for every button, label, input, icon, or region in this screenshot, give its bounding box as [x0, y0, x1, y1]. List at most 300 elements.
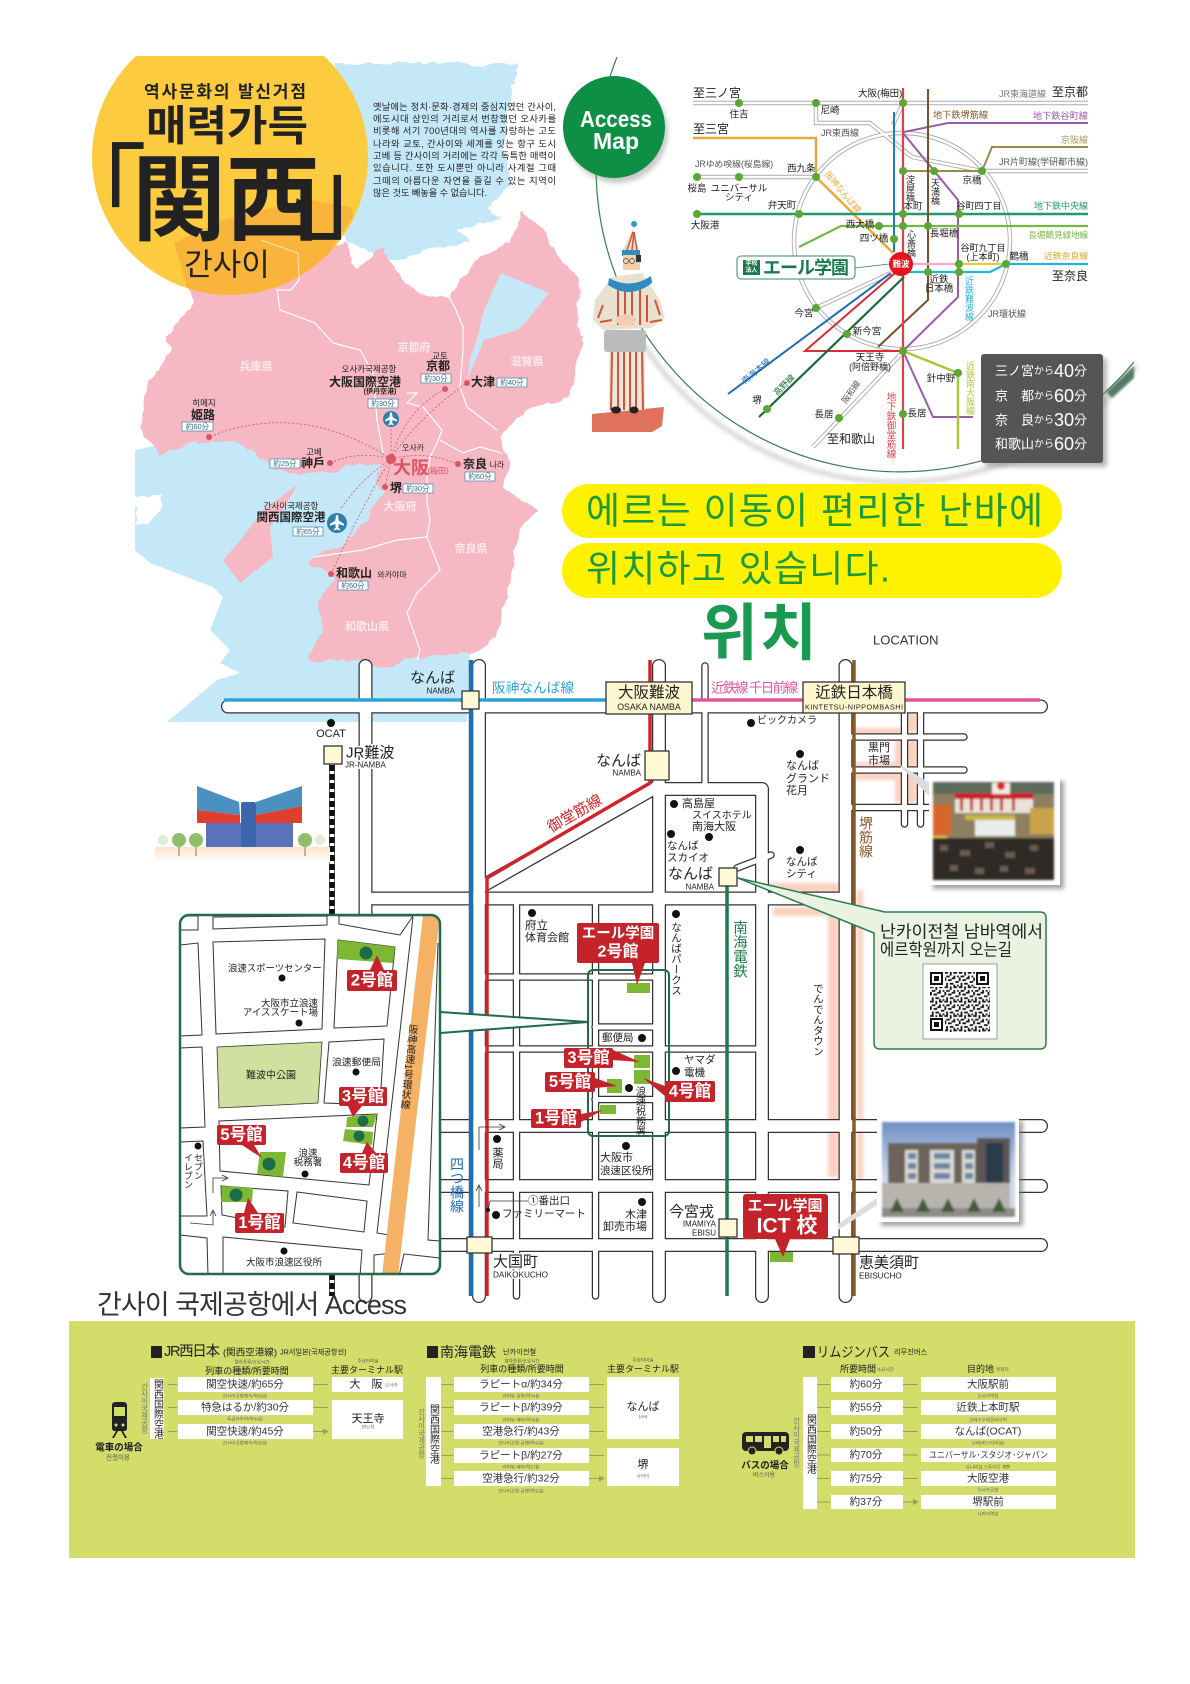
access map badge	[563, 76, 668, 183]
station labels: 至三宮	[693, 121, 729, 136]
namba hub: 難波	[892, 259, 910, 269]
yellow disc	[92, 56, 368, 295]
section: limousine bus: 유니버설 스튜디오 재팬	[966, 1464, 1010, 1470]
rail lines	[224, 660, 1040, 1296]
inset building tags: 2号館	[351, 970, 393, 990]
map labels: 近鉄線 千日前線	[711, 680, 798, 696]
section: limousine bus: 大阪駅前	[967, 1378, 1009, 1390]
inset building tags	[217, 955, 397, 1233]
section: limousine bus: 関西国際空港	[804, 1414, 816, 1474]
station box: osaka namba: 大阪難波	[618, 684, 680, 702]
title: kansai kanji: 関西	[132, 148, 320, 252]
section: limousine bus: 堺駅前	[972, 1495, 1004, 1508]
station labels: 針中野	[927, 372, 956, 384]
section: limousine bus: ユニバーサル･スタジオ･ジャパン	[929, 1450, 1048, 1460]
section: limousine bus: 約55分	[850, 1400, 883, 1414]
map labels: 府立	[525, 918, 548, 932]
city labels: 와카야마	[377, 570, 407, 580]
station labels: 京阪線	[1061, 134, 1088, 145]
station labels: JR東海道線	[999, 88, 1046, 99]
school sign: エール学園	[763, 257, 849, 278]
QR code	[923, 964, 997, 1039]
station labels: 阪和線	[840, 378, 863, 405]
section: JR West: 특급하루카/약30분	[227, 1416, 263, 1422]
inset map	[180, 915, 440, 1276]
station labels: 長堀橋	[930, 228, 959, 240]
park	[217, 1042, 322, 1108]
station labels: 今宮	[794, 308, 814, 320]
map labels: JR-NAMBA	[345, 760, 387, 770]
section: limousine bus: 近鉄上本町駅	[956, 1400, 1020, 1414]
station labels: (上本町)	[966, 251, 1000, 262]
colored lines	[693, 88, 1088, 449]
map labels: 堺筋線	[858, 816, 874, 858]
station labels: 淀屋橋	[905, 175, 915, 203]
station labels: 長堀鶴見緑地線	[1028, 230, 1088, 240]
station box: kintetsu nippombashi: KINTETSU-NIPPOMBASHI	[805, 702, 903, 712]
city labels: 大津	[471, 374, 495, 389]
time boxes: 約40分	[500, 377, 524, 387]
inset labels: イレブン	[183, 1153, 193, 1189]
section: Nankai: 列車の種類/所要時間	[480, 1363, 564, 1374]
station labels: 桜島	[687, 182, 707, 194]
section: JR West: 오사카	[385, 1382, 398, 1388]
map labels: 卸売市場	[603, 1219, 647, 1233]
section: Nankai: 주요터미널	[632, 1356, 654, 1364]
map labels: 今宮戎	[669, 1204, 714, 1220]
stations	[693, 99, 1010, 422]
yellow headline: 위치하고 있습니다.	[586, 548, 890, 590]
title: reading: 간사이	[184, 248, 270, 282]
section: JR West: 텐노지	[362, 1424, 374, 1430]
access map badge: Access	[580, 106, 652, 132]
map labels: なんば	[786, 856, 818, 868]
intro text: 고베 등 간사이의 거리에는 각각 독특한 매력이	[373, 150, 556, 161]
school building tags on map: 1号館	[535, 1108, 577, 1128]
island small	[135, 493, 162, 525]
map labels: 浪速区役所	[600, 1164, 653, 1177]
station labels: 近鉄	[929, 274, 949, 286]
map labels: NAMBA	[613, 768, 642, 778]
map labels: スカイオ	[667, 852, 709, 864]
station labels: 天王寺	[856, 352, 885, 364]
map labels: 電機	[684, 1066, 705, 1079]
section: JR West: 간사이공항쾌속/약65분	[223, 1392, 267, 1400]
section: limousine bus: 사카이역앞	[977, 1510, 999, 1518]
section: limousine bus: 約75分	[850, 1472, 883, 1484]
station labels: 大阪(梅田)	[858, 88, 902, 100]
city labels: 神戸	[301, 455, 325, 470]
inset labels: 大阪市浪速区役所	[246, 1256, 322, 1268]
JR gray lines	[693, 103, 1088, 447]
station labels: 谷町九丁目	[960, 243, 1006, 253]
photo: kuromon market	[897, 763, 1064, 889]
building illustration: OCAT	[155, 786, 330, 862]
time boxes: 約30分	[371, 398, 395, 408]
section: JR West	[140, 1343, 403, 1446]
inset labels: 阪神高速1号環状線	[398, 1023, 418, 1111]
station labels: ユニバーサル	[711, 184, 768, 194]
title: subtitle: 역사문화의 발신거점	[144, 82, 306, 102]
city labels: 간사이국제공항	[264, 501, 319, 511]
station labels: 住吉	[729, 108, 749, 120]
station labels: 南海本線	[740, 356, 773, 386]
label: train: 전철이용	[106, 1452, 130, 1462]
station labels: 本町	[903, 200, 923, 212]
station labels: 弁天町	[768, 200, 797, 212]
highlight strips	[768, 713, 917, 1180]
icon: itami airport	[383, 411, 399, 427]
label: bus: 버스이용	[753, 1471, 776, 1479]
section: limousine bus: 오사카역앞	[977, 1392, 999, 1400]
section: JR West: JR서일본(국제공항선)	[280, 1348, 346, 1356]
map labels: 南海電鉄	[731, 920, 747, 978]
station labels: 地下鉄中央線	[1034, 200, 1088, 211]
map labels: グランド	[786, 771, 830, 785]
station labels: 大阪港	[691, 220, 720, 232]
map labels: 南海大阪	[692, 819, 736, 833]
kansai map: 和歌山県	[345, 619, 389, 633]
school building tags on map: 3号館	[567, 1048, 610, 1067]
city labels: 교토	[432, 351, 448, 361]
station labels: 長居	[907, 408, 927, 420]
routes	[209, 383, 467, 574]
map labels: シティ	[786, 868, 817, 880]
school building tags on map: 4号館	[669, 1082, 711, 1100]
station labels: (阿倍野橋)	[849, 361, 891, 372]
section: JR West: 간사이국제공항	[140, 1382, 150, 1434]
station labels: 近鉄難波線	[964, 275, 974, 322]
map labels: 黒門	[868, 741, 890, 754]
school sign: 学校	[745, 259, 758, 267]
section: Nankai: 간사이공항 급행/약32분	[498, 1488, 544, 1494]
figure: kuidaore doll	[592, 221, 665, 432]
section: limousine bus: 約60分	[850, 1378, 883, 1390]
city labels: 大阪	[393, 458, 429, 478]
sea upper	[335, 63, 517, 260]
station labels: 高野線	[771, 372, 797, 398]
map labels: ①番出口	[528, 1195, 570, 1207]
map labels: NAMBA	[686, 882, 715, 892]
prefecture borders	[261, 240, 502, 660]
section: Nankai: ラピートβ/約39分	[479, 1400, 563, 1414]
section: limousine bus: 긴테츠우에혼마치역	[969, 1416, 1007, 1424]
kansai map: 大阪府	[384, 499, 416, 513]
map labels: 大国町	[493, 1254, 538, 1270]
callout: QR route: 에르학원까지 오는길	[880, 940, 1012, 960]
map labels: なんば	[786, 759, 819, 772]
map labels: 阪神なんば線	[492, 680, 574, 696]
section: Nankai: 空港急行/約32分	[482, 1472, 560, 1484]
section: Nankai: 라피토 베타/약27분	[502, 1464, 540, 1470]
yellow headline: 에르는 이동이 편리한 난바에	[586, 490, 1043, 532]
section: JR West: 特急はるか/約30分	[201, 1400, 290, 1414]
map labels: 薬局	[491, 1147, 504, 1170]
station labels: 新今宮	[853, 326, 881, 338]
inset blocks	[180, 916, 440, 1276]
inset labels: セブン	[193, 1153, 203, 1180]
green school plots	[600, 983, 793, 1262]
intro text: 많은 것도 빼놓을 수 없습니다.	[373, 188, 487, 198]
intro text: 옛날에는 정치·문화·경제의 중심지였던 간사이,	[373, 101, 556, 112]
section: JR West: 関西国際空港	[152, 1379, 164, 1439]
yellow headline	[562, 484, 1062, 598]
city dots	[206, 380, 470, 577]
map labels: ヤマダ	[684, 1053, 716, 1066]
section: Nankai: 열차종류/소요시간	[504, 1358, 540, 1364]
station labels	[687, 85, 1088, 459]
kansai map: 奈良県	[454, 541, 488, 555]
intro text: 그때의 아름다운 자연을 즐길 수 있는 지역이	[373, 175, 556, 186]
map labels: 体育会館	[525, 930, 569, 944]
section: limousine bus: 난바(버스터미널)	[972, 1440, 1005, 1446]
school sign	[737, 256, 889, 279]
station labels: 至奈良	[1052, 268, 1088, 283]
section: Nankai: 간사이공항 급행/약43분	[498, 1440, 544, 1446]
inset building tags: 1号館	[238, 1213, 281, 1232]
section: Nankai: なんば	[626, 1400, 660, 1413]
section: Nankai: 堺	[638, 1458, 648, 1471]
section: JR West: 간사이공항쾌속/약30분	[223, 1440, 267, 1446]
location heading	[701, 600, 938, 668]
section: limousine bus: 간사이국제공항	[792, 1416, 802, 1468]
section: JR West: 関空快速/約45分	[206, 1424, 284, 1438]
travel time box	[981, 354, 1107, 467]
section: JR West: 주요터미널	[357, 1358, 379, 1364]
school building tags on map: 5号館	[549, 1072, 591, 1091]
section: Nankai	[418, 1344, 679, 1494]
school building tags on map: ICT 校	[757, 1214, 817, 1238]
section: Nankai: 간사이국제공항	[418, 1407, 426, 1459]
station labels: 四ツ橋	[860, 232, 889, 244]
access heading: 간사이 국제공항에서 Access	[97, 1290, 407, 1320]
travel time box: 和歌山から60分	[995, 434, 1087, 454]
map labels: EBISU	[692, 1228, 716, 1238]
city labels: 姫路	[191, 407, 215, 422]
access panel	[69, 1321, 1135, 1558]
icon: train	[112, 1402, 127, 1438]
map labels: DAIKOKUCHO	[493, 1270, 548, 1280]
namba hub	[889, 252, 913, 276]
travel time box: 三ノ宮から40分	[995, 361, 1087, 381]
time boxes: 約25分	[273, 458, 297, 468]
station labels: 阪神なんば線	[823, 169, 864, 215]
section: JR West: JR西日本	[164, 1343, 220, 1360]
inset zoom connector	[440, 1012, 588, 1033]
city labels: 오사카국제공항	[342, 364, 397, 374]
sea lower	[135, 430, 470, 722]
road network	[228, 666, 1041, 1296]
station labels: 天満橋	[930, 178, 940, 206]
section: Nankai: 라피토 알파/약34분	[502, 1392, 540, 1400]
intro text: 있습니다. 또한 도시뿐만 아니라 사계절 그때	[373, 162, 556, 173]
station labels: 近鉄南大阪線	[965, 360, 975, 416]
land	[140, 200, 583, 667]
travel time box: 京 都から60分	[995, 386, 1087, 406]
section: limousine bus: 約37分	[850, 1495, 883, 1508]
station labels: シティ	[725, 192, 753, 204]
map labels: でんでんタウン	[812, 983, 824, 1056]
map labels: EBISUCHO	[859, 1272, 902, 1280]
map labels: OCAT	[316, 728, 346, 740]
school building tags on map	[531, 923, 828, 1257]
school building tags on map: エール学園	[747, 1196, 823, 1214]
section: Nankai: 라피토 베타/약39분	[502, 1416, 540, 1424]
map labels	[316, 670, 919, 1280]
station labels: 心斎橋	[906, 229, 916, 258]
stations	[324, 691, 859, 1254]
section: limousine bus: 리무진버스	[894, 1348, 927, 1356]
section: Nankai: 南海電鉄	[440, 1344, 496, 1360]
kansai map: 滋賀県	[510, 354, 544, 368]
station box: kintetsu nippombashi	[803, 682, 905, 713]
section: JR West: 主要ターミナル駅	[331, 1364, 403, 1375]
station labels: JR環状線	[988, 308, 1026, 319]
section: Nankai: ラピートα/約34分	[479, 1378, 563, 1390]
map labels: 高島屋	[682, 796, 715, 810]
intro text: 나라와 교토, 간사이와 세계를 잇는 항구 도시	[373, 138, 556, 149]
section: limousine bus: 大阪空港	[967, 1472, 1009, 1484]
time boxes: 約65分	[296, 526, 320, 536]
map labels: 四つ橋線	[449, 1157, 465, 1213]
section: JR West: 열차종류/소요시간	[234, 1358, 270, 1366]
inset labels: 大阪市立浪速	[261, 998, 318, 1010]
city labels: 和歌山	[336, 565, 372, 580]
map labels: なんば	[410, 670, 455, 686]
school building tags on map: 2号館	[598, 942, 638, 960]
section: Nankai: 난카이전철	[503, 1348, 536, 1356]
access map badge: Map	[593, 128, 639, 154]
kansai map	[135, 63, 583, 722]
station labels: JRゆめ咲線(桜島線)	[695, 158, 773, 169]
awaji island	[223, 485, 297, 583]
section: JR West: (関西空港線)	[223, 1346, 277, 1358]
time boxes: 約60分	[341, 580, 365, 590]
station labels: 地下鉄御堂筋線	[884, 391, 896, 459]
station labels: 鶴橋	[1009, 250, 1029, 262]
city labels	[191, 351, 505, 580]
map labels: 郵便局	[602, 1031, 634, 1044]
city labels: 大阪国際空港	[329, 374, 401, 389]
plots	[221, 940, 395, 1202]
title circle	[92, 56, 368, 295]
school sign: 法人	[745, 266, 758, 274]
section: limousine bus: 목적지	[996, 1366, 1009, 1373]
map labels: NAMBA	[427, 686, 456, 696]
title: kansai kanji: 」	[306, 141, 406, 253]
label: train	[95, 1442, 143, 1462]
section: JR West: 大 阪	[350, 1376, 382, 1390]
inset building tags: 5号館	[220, 1125, 263, 1144]
time boxes: 約60分	[468, 471, 492, 481]
icon: bus	[742, 1432, 789, 1455]
station labels: 西九条	[787, 162, 816, 174]
map labels: スイスホテル	[692, 810, 752, 822]
map labels: 大阪市	[600, 1150, 633, 1164]
time boxes: 約60分	[186, 421, 210, 431]
map labels: IMAMIYA	[683, 1220, 717, 1228]
title: main korean: 매력가득	[146, 102, 308, 150]
map labels: なんばパークス	[670, 922, 682, 996]
section: limousine bus: 所要時間	[840, 1364, 876, 1374]
map labels: なんば	[667, 840, 699, 852]
inset labels: 浪速	[298, 1148, 318, 1160]
section: limousine bus: なんば(OCAT)	[955, 1426, 1021, 1438]
station labels: 京橋	[962, 174, 982, 186]
land overlay in disc	[174, 200, 353, 295]
station labels: 至京都	[1052, 85, 1088, 99]
map labels: 恵美須町	[859, 1254, 919, 1272]
map labels: 市場	[868, 754, 890, 767]
street map	[224, 660, 1041, 1296]
callout: QR route: 난카이전철 남바역에서	[880, 922, 1043, 942]
time boxes: 約30分	[424, 373, 448, 383]
city labels: 히메지	[192, 398, 216, 408]
label: train: 電車の場合	[95, 1442, 143, 1454]
inset labels: 難波中公園	[246, 1068, 296, 1082]
section: JR West: 列車の種類/所要時間	[205, 1365, 289, 1376]
focus area rectangle	[588, 970, 669, 1136]
label: bus	[741, 1460, 789, 1479]
station labels: 至和歌山	[827, 432, 875, 446]
section: limousine bus	[792, 1344, 1056, 1518]
travel time box: 奈 良から30分	[995, 410, 1087, 430]
intro text	[373, 101, 556, 198]
location heading: LOCATION	[873, 632, 938, 648]
section: Nankai: ラピートβ/約27分	[479, 1448, 563, 1462]
section: Nankai: 関西国際空港	[428, 1404, 440, 1464]
city labels: (梅田)	[427, 466, 449, 476]
highway	[382, 915, 440, 1276]
city labels: 오사카	[402, 444, 425, 452]
lake biwa	[467, 273, 549, 380]
city labels: 堺	[390, 480, 402, 495]
school building tags on map: エール学園	[582, 924, 654, 942]
city labels: 京都	[426, 358, 450, 373]
station labels: 谷町四丁目	[956, 201, 1002, 211]
station labels: 堺	[752, 394, 762, 406]
title: kansai kanji: 「	[47, 137, 147, 249]
section: limousine bus: 約70分	[850, 1448, 883, 1461]
station labels: JR東西線	[821, 127, 859, 138]
access map arc	[596, 57, 1137, 482]
station labels: 至三ノ宮	[693, 85, 741, 100]
station labels: 地下鉄谷町線	[1033, 110, 1088, 121]
kansai map: 京都府	[398, 340, 430, 354]
callout: QR route	[738, 878, 1046, 1049]
station box: osaka namba: OSAKA NAMBA	[617, 702, 681, 712]
time boxes	[182, 373, 527, 590]
prefecture names: 兵庫県	[240, 359, 272, 373]
map labels: なんば	[668, 866, 713, 882]
section: limousine bus: 소요시간	[877, 1366, 895, 1372]
map labels: JR難波	[346, 744, 394, 762]
plot icons	[230, 946, 372, 1202]
map labels: 御堂筋線	[545, 792, 605, 836]
map labels: 花月	[786, 784, 808, 797]
station labels: 西大橋	[846, 218, 875, 230]
station labels: 尼崎	[820, 104, 840, 116]
inset labels: 浪速スポーツセンター	[228, 962, 322, 974]
station labels: JR片町線(学研都市線)	[999, 156, 1088, 167]
intro text: 비롯해 서기 700년대의 역사를 자랑하는 고도	[373, 125, 556, 136]
station box: kintetsu nippombashi: 近鉄日本橋	[815, 684, 893, 702]
inset labels	[183, 962, 418, 1268]
section: Nankai: 主要ターミナル駅	[607, 1363, 679, 1374]
section: limousine bus: 오사카공항	[977, 1486, 999, 1494]
city labels: 나라	[490, 460, 505, 470]
city labels: 奈良	[463, 456, 487, 471]
